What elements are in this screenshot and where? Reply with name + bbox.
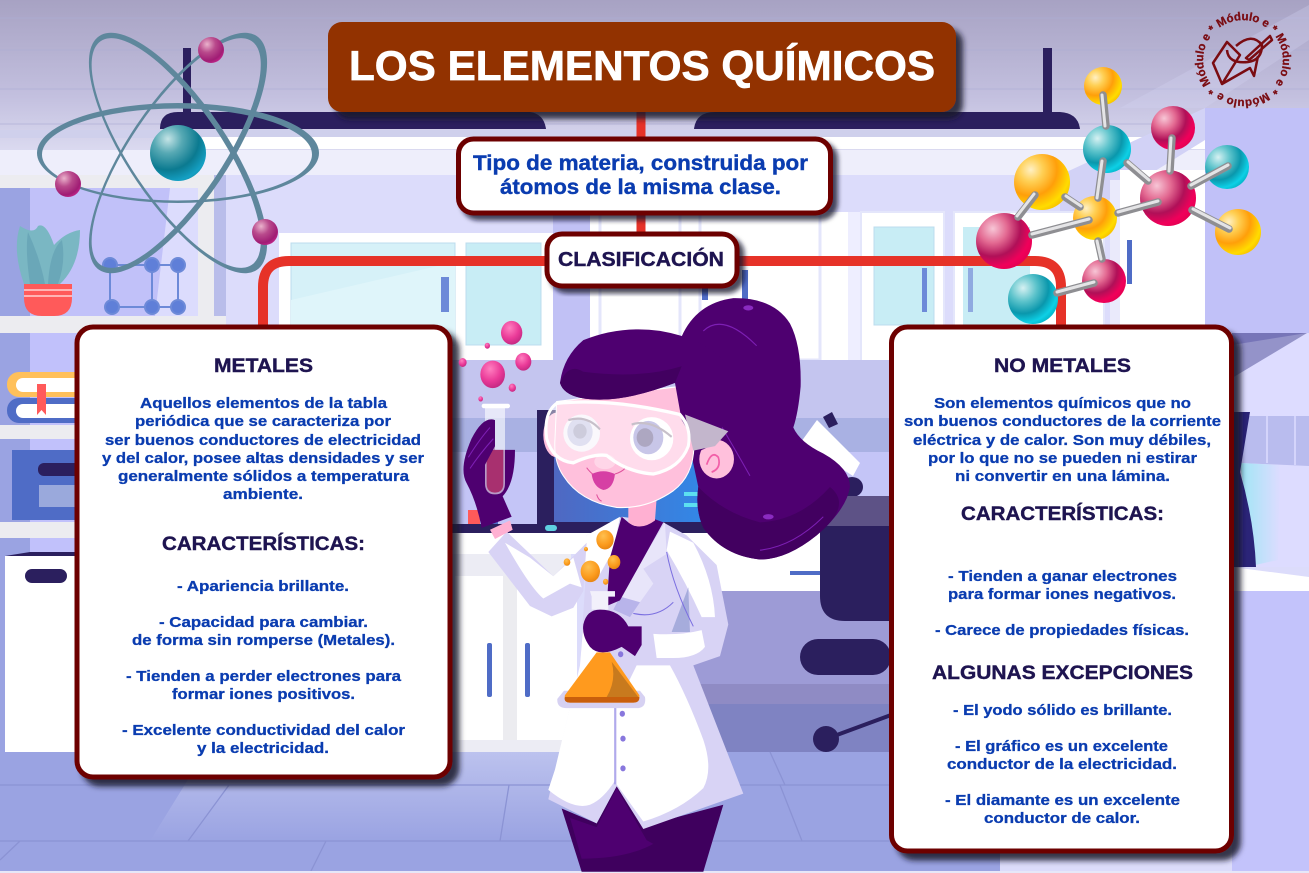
text: exceptions: conductor de la electricidad. — [947, 756, 1177, 773]
icon: cube molecule — [103, 258, 185, 314]
goggle strap — [685, 415, 728, 451]
definition box: Tipo de materia, construida por — [473, 152, 808, 175]
coat buttons — [618, 651, 626, 771]
panel: metales: CARACTERÍSTICAS: — [162, 532, 365, 555]
text: metales definition: ser buenos conductores de electricidad — [105, 432, 421, 449]
panel: no metales: CARACTERÍSTICAS: — [961, 502, 1164, 525]
scientist illustration — [459, 298, 850, 872]
panel: no metales: ALGUNAS EXCEPCIONES — [932, 662, 1193, 684]
text: metales characteristics: - Capacidad para cambiar. — [159, 614, 368, 631]
lab coat — [548, 517, 743, 829]
bubbles: orange — [564, 530, 620, 585]
atom illustration — [37, 8, 319, 298]
panel: metales: METALES — [214, 355, 313, 377]
panel: no metales: NO METALES — [994, 355, 1131, 377]
text: no metales definition: eléctrica y de calor. Son muy débiles, — [913, 432, 1211, 449]
text: no metales definition — [904, 395, 1221, 485]
text: exceptions: - El diamante es un excelente — [945, 792, 1180, 809]
text: no metales definition: Son elementos químicos que no — [934, 395, 1191, 412]
head — [543, 329, 734, 508]
text: metales characteristics: formar iones positivos. — [172, 686, 355, 703]
text: no metales characteristics — [935, 568, 1189, 639]
gloved hand: flask — [583, 610, 642, 656]
hood shelves — [160, 48, 1080, 129]
orbit: descending — [58, 8, 298, 298]
upper cabinets — [279, 200, 1132, 362]
definition box: átomos de la misma clase. — [500, 176, 781, 199]
text: no metales characteristics: - Tienden a ganar electrones — [948, 568, 1177, 585]
panel: metales — [77, 327, 450, 777]
text: metales characteristics: - Tienden a perder electrones para — [126, 668, 402, 685]
connector lines — [263, 105, 1061, 330]
left shelves — [0, 175, 226, 753]
text: exceptions: - El yodo sólido es brillante. — [953, 702, 1172, 719]
text: metales definition: y del calor, posee altas densidades y ser — [102, 450, 424, 467]
text: metales characteristics: y la electricidad. — [197, 740, 329, 757]
electrons — [55, 37, 278, 245]
icon: plant — [17, 225, 80, 316]
text: no metales definition: son buenos conductores de la corriente — [904, 413, 1221, 430]
logo: Módulo e: Módulo e — [1217, 92, 1270, 108]
text: metales definition: generalmente sólidos a temperatura — [118, 468, 410, 485]
raised arm — [488, 520, 587, 616]
orbit: horizontal — [37, 103, 319, 203]
flask — [557, 591, 645, 708]
right wall — [1232, 333, 1309, 871]
text: no metales definition: por lo que no se pueden ni estirar — [928, 450, 1197, 467]
definition box — [458, 139, 830, 213]
text: metales characteristics: - Apariencia brillante. — [177, 578, 349, 595]
counter and lower cabinets — [451, 360, 891, 752]
ponytail — [680, 298, 850, 559]
neck — [628, 498, 657, 527]
molecule illustration — [976, 67, 1261, 324]
text: no metales characteristics: - Carece de propiedades físicas. — [935, 622, 1189, 639]
orbit: ascending — [58, 8, 298, 298]
logo: Módulo e — [1194, 12, 1292, 108]
classification box — [547, 234, 737, 286]
office chair — [800, 496, 891, 752]
monitor — [537, 410, 727, 533]
inner shirt — [607, 517, 663, 606]
text: exceptions — [945, 702, 1180, 827]
logo: Módulo e: Módulo e — [1194, 34, 1210, 88]
text: no metales characteristics: para formar iones negativos. — [948, 586, 1176, 603]
text: exceptions: - El gráfico es un excelente — [955, 738, 1168, 755]
logo: Módulo e: * — [1208, 90, 1214, 95]
text: metales definition: Aquellos elementos de la tabla — [140, 395, 388, 412]
hair front — [560, 329, 730, 451]
bubbles: pink — [459, 321, 531, 402]
text: metales characteristics: de forma sin romperse (Metales). — [132, 632, 395, 649]
gloved hand: left — [463, 419, 515, 528]
floor — [0, 752, 1309, 873]
text: metales definition — [102, 395, 424, 503]
text: metales characteristics: - Excelente conductividad del calor — [122, 722, 405, 739]
title: LOS ELEMENTOS QUÍMICOS — [349, 42, 935, 89]
logo: Módulo e: * — [1272, 25, 1278, 30]
trousers — [562, 786, 723, 872]
icon: book and pencil — [1213, 36, 1272, 84]
logo: Módulo e: * — [1208, 25, 1214, 30]
text: metales characteristics — [122, 578, 405, 757]
logo: Módulo e: Módulo e — [1276, 32, 1292, 86]
test tube — [466, 404, 510, 494]
classification box: CLASIFICACIÓN — [558, 247, 724, 271]
icon: blue box — [12, 450, 99, 520]
nucleus — [150, 125, 206, 181]
text: no metales definition: ni convertir en una lámina. — [955, 468, 1170, 485]
logo: Módulo e: Módulo e — [1216, 12, 1269, 28]
panel: no metales — [892, 327, 1232, 851]
goggles — [546, 402, 689, 474]
eyes — [563, 415, 600, 452]
text: metales definition: periódica que se caracteriza por — [135, 413, 391, 430]
white cabinet — [5, 552, 100, 752]
text: metales definition: ambiente. — [223, 486, 303, 503]
title — [328, 22, 956, 112]
icon: books — [7, 372, 97, 423]
nose and mouth — [594, 454, 616, 469]
text: exceptions: conductor de calor. — [984, 810, 1140, 827]
logo: Módulo e: * — [1272, 90, 1278, 95]
microscope — [801, 412, 863, 497]
